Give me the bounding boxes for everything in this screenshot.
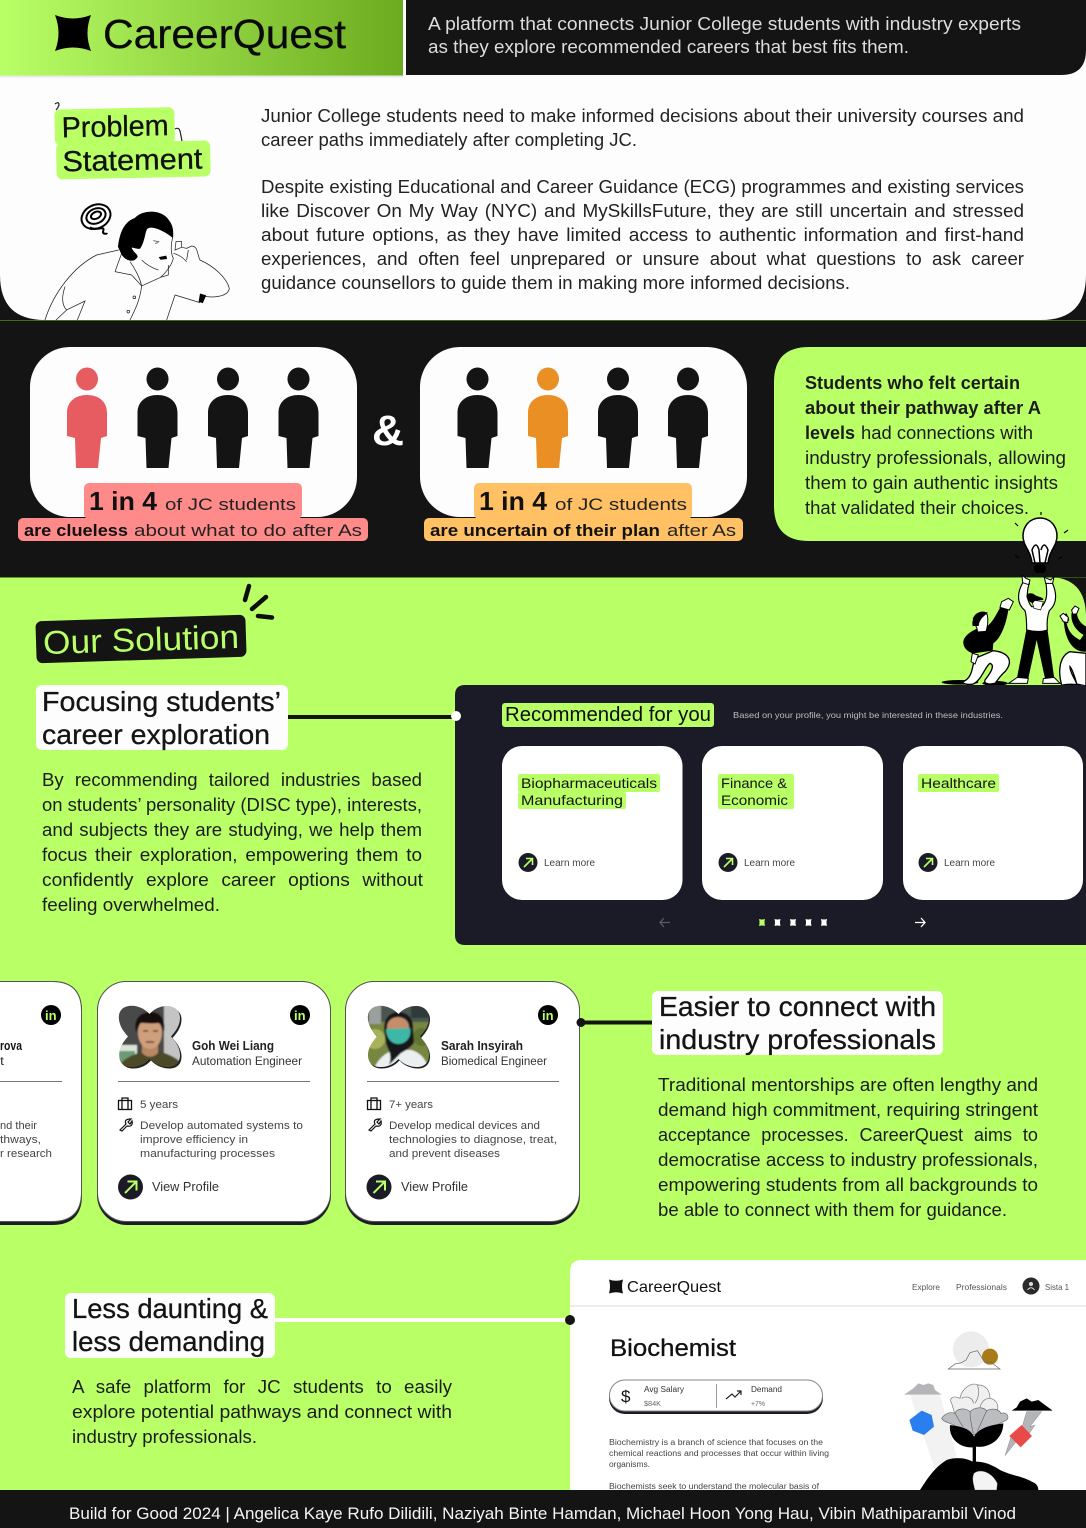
stats pill: $84K	[644, 1401, 661, 1408]
card: finance and economic: Learn more	[744, 858, 795, 869]
card: partially visible professional: rova	[0, 1039, 23, 1053]
card: finance and economic: Finance &	[721, 775, 788, 791]
card: Goh Wei Liang: Develop automated systems to	[140, 1120, 303, 1132]
card: Goh Wei Liang: improve efficiency in	[140, 1134, 248, 1146]
heading: recommended for you	[502, 703, 1003, 727]
text block: biochemistry description	[609, 1438, 829, 1491]
heading: our solution: Our Solution	[42, 618, 240, 661]
label: 1 in 4 clueless: are clueless	[24, 521, 128, 540]
heading: easier to connect: industry professionals	[659, 1024, 936, 1055]
text block: problem description: about future options, as they have limited access to authentic information and first-hand	[261, 225, 1024, 245]
heading: focusing students	[36, 685, 288, 750]
card: Goh Wei Liang: manufacturing processes	[140, 1148, 276, 1160]
text block: focusing description: By recommending tailored industries based	[42, 769, 422, 790]
button: view profile: View Profile	[401, 1179, 468, 1194]
text block: focusing description: focus their exploration, empowering them to	[42, 844, 422, 865]
card: healthcare: Healthcare	[921, 775, 996, 791]
header	[0, 0, 1086, 78]
photo: Sarah Insyirah	[368, 1006, 430, 1068]
illustration: people reaching up	[942, 575, 1086, 687]
heading: problem statement	[54, 106, 211, 180]
text block: problem description	[261, 106, 1024, 293]
text block: biochemistry description: organisms.	[609, 1460, 650, 1469]
illustration: biochemist plant	[904, 1331, 1053, 1490]
icon: four people, one red	[67, 368, 318, 468]
icon: light bulb	[1015, 512, 1068, 573]
icon: briefcase	[368, 1098, 380, 1110]
button: view profile	[118, 1174, 219, 1200]
heading: less daunting: less demanding	[72, 1326, 265, 1357]
text block: less daunting description: A safe platform for JC students to easily	[72, 1376, 453, 1397]
card: biopharmaceuticals: Manufacturing	[521, 792, 623, 808]
icon: four people, one orange	[458, 368, 708, 468]
text block: connect description: demand high commitment, requiring stringent	[658, 1099, 1038, 1120]
text block: less daunting description: explore potential pathways and connect with	[72, 1401, 452, 1422]
heading: easier to connect: Easier to connect with	[659, 991, 936, 1022]
icon: LinkedIn: in	[294, 1008, 306, 1023]
label: 1 in 4 uncertain: after As	[667, 521, 736, 540]
text block: problem description: guidance counsellors to guide them in making more informed decisions.	[261, 273, 850, 293]
panel: authentic insights callout: that validated their choices.	[805, 497, 1029, 518]
text block: problem description: career paths immediately after completing JC.	[261, 130, 637, 150]
card: Goh Wei Liang: 5 years	[140, 1099, 179, 1111]
card: healthcare: Learn more	[944, 858, 995, 869]
panel: statistic uncertain	[420, 347, 747, 541]
header: tagline: A platform that connects Junior College students with industry experts	[428, 14, 1021, 34]
icon: LinkedIn	[290, 1005, 310, 1025]
label: 1 in 4 clueless	[18, 483, 368, 541]
header: tagline: as they explore recommended careers that best fits them.	[428, 37, 909, 57]
card: biopharmaceuticals: Learn more	[544, 858, 595, 869]
stats pill	[609, 1380, 823, 1414]
footer: Build for Good 2024 | Angelica Kaye Rufo Dilidili, Naziyah Binte Hamdan, Michael Hoon Yong Hau, Vibin Mathiparambil Vinod	[69, 1504, 1016, 1523]
nav bar: Sista 1	[1045, 1283, 1070, 1292]
header: tagline	[406, 0, 1086, 75]
text block: connect description: acceptance processes. CareerQuest aims to	[658, 1124, 1038, 1145]
card: partially visible professional: t	[0, 1056, 5, 1068]
text block: biochemistry description: Biochemists seek to understand the molecular basis of	[609, 1482, 820, 1491]
stats pill: Demand	[751, 1385, 782, 1394]
icon: emphasis sparks	[245, 586, 272, 618]
text block: connect description: democratise access to industry professionals,	[658, 1149, 1038, 1170]
heading: less daunting	[65, 1293, 275, 1358]
card: Sarah Insyirah: 7+ years	[389, 1099, 434, 1111]
carousel controls	[660, 918, 925, 927]
text block: problem description: Junior College students need to make informed decisions about their university courses and	[261, 106, 1024, 126]
footer	[0, 1490, 1086, 1528]
heading: focusing students: Focusing students’	[42, 686, 281, 717]
card: finance and economic	[702, 746, 883, 900]
card: Sarah Insyirah: technologies to diagnose, treat,	[389, 1134, 557, 1146]
card: partially visible professional: in	[45, 1008, 57, 1023]
text block: connect description	[658, 1074, 1038, 1220]
label: 1 in 4 uncertain	[424, 483, 743, 541]
text block: less daunting description	[72, 1376, 453, 1447]
text block: biochemistry description: chemical reactions and processes that occur within living	[609, 1449, 829, 1458]
card: Goh Wei Liang: Goh Wei Liang	[192, 1039, 274, 1053]
photo: Goh Wei Liang	[118, 1006, 182, 1068]
connector line	[288, 711, 461, 721]
card: Goh Wei Liang: Automation Engineer	[192, 1056, 302, 1068]
text block: focusing description: confidently explore career options without	[42, 869, 423, 890]
icon: LinkedIn	[538, 1005, 558, 1025]
text block: focusing description: feeling overwhelmed.	[42, 894, 220, 915]
card: Sarah Insyirah: Develop medical devices and	[389, 1120, 540, 1132]
heading: our solution	[35, 586, 272, 663]
connector line	[576, 1018, 652, 1027]
icon: logo star	[55, 15, 91, 51]
card: biopharmaceuticals	[502, 746, 682, 900]
text block: connect description: Traditional mentorships are often lengthy and	[658, 1074, 1038, 1095]
heading: problem statement: Statement	[62, 143, 203, 178]
heading: problem statement: Problem	[61, 110, 169, 144]
label: 1 in 4 clueless: 1 in 4	[89, 486, 158, 516]
text block: focusing description: on students’ personality (DISC type), interests,	[42, 794, 422, 815]
label: 1 in 4 clueless: of JC students	[165, 495, 296, 514]
panel: authentic insights callout: about their pathway after A	[805, 397, 1041, 418]
heading: focusing students: career exploration	[42, 719, 270, 750]
text block: biochemistry description: Biochemistry is a branch of science that focuses on the	[609, 1438, 824, 1447]
section: easier to connect	[576, 991, 1038, 1220]
card: Goh Wei Liang	[97, 981, 331, 1225]
label: 1 in 4 uncertain: of JC students	[555, 495, 687, 514]
icon: wrench	[369, 1119, 381, 1131]
card: partially visible professional: nd their	[0, 1120, 37, 1132]
stats pill: Avg Salary	[644, 1385, 684, 1394]
text block: problem description: experiences, and often feel unprepared or unsure about what questions to ask career	[261, 249, 1024, 269]
icon: small question marks	[55, 103, 182, 141]
label: 1 in 4 uncertain: are uncertain of their plan	[430, 521, 660, 540]
heading: less daunting: Less daunting &	[72, 1293, 268, 1324]
heading: easier to connect	[652, 991, 943, 1055]
panel: authentic insights callout: them to gain authentic insights	[805, 472, 1058, 493]
card: Sarah Insyirah	[345, 981, 580, 1225]
nav bar: CareerQuest	[627, 1279, 722, 1296]
card: partially visible professional: thways,	[0, 1134, 41, 1146]
panel: career detail mockup: Biochemist	[610, 1335, 736, 1362]
text block: connect description: empowering students from all backgrounds to	[658, 1174, 1038, 1195]
text block: problem description: like Discover On My Way (NYC) and MySkillsFuture, they are still uncertain and stressed	[261, 201, 1024, 221]
stats pill: $	[621, 1387, 631, 1406]
card: partially visible professional: r research	[0, 1148, 52, 1160]
text block: focusing description: and subjects they are studying, we help them	[42, 819, 422, 840]
button: view profile: View Profile	[152, 1179, 219, 1194]
icon: wrench	[120, 1119, 132, 1131]
panel: statistic clueless	[18, 347, 368, 541]
button: view profile	[366, 1174, 468, 1200]
panel: authentic insights callout: had connections with	[861, 422, 1033, 443]
panel: authentic insights callout: Students who felt certain	[805, 372, 1020, 393]
card: Sarah Insyirah: Sarah Insyirah	[441, 1039, 523, 1053]
panel: recommended for you mockup	[288, 685, 1086, 945]
text block: less daunting description: industry professionals.	[72, 1426, 257, 1447]
heading: recommended for you: Recommended for you	[505, 704, 711, 726]
stats pill: +7%	[751, 1401, 765, 1408]
panel: authentic insights callout: industry professionals, allowing	[805, 447, 1066, 468]
text block: focusing description	[42, 769, 423, 915]
header: logo banner	[0, 0, 403, 78]
card: Sarah Insyirah: Biomedical Engineer	[441, 1056, 547, 1068]
text block: connect description: be able to connect with them for guidance.	[658, 1199, 1007, 1220]
label: 1 in 4 clueless: about what to do after As	[134, 521, 362, 540]
card: healthcare	[903, 746, 1083, 900]
illustration: confused student	[45, 200, 229, 320]
icon: briefcase	[118, 1098, 132, 1110]
panel: problem statement	[0, 0, 1086, 321]
nav bar	[570, 1278, 1086, 1307]
text block: problem description: Despite existing Educational and Career Guidance (ECG) programmes and existing services	[261, 177, 1024, 197]
card: partially visible professional	[0, 981, 82, 1225]
panel: authentic insights callout: levels	[805, 422, 855, 443]
heading: recommended for you: Based on your profile, you might be interested in these industries.	[733, 710, 1003, 720]
card: Sarah Insyirah: and prevent diseases	[389, 1148, 501, 1160]
card: biopharmaceuticals: Biopharmaceuticals	[521, 775, 657, 791]
icon: ampersand: &	[372, 407, 404, 455]
card: finance and economic: Economic	[721, 792, 788, 808]
nav bar: Professionals	[956, 1283, 1007, 1292]
nav bar: Explore	[912, 1283, 941, 1292]
panel: career detail mockup	[275, 1260, 1086, 1491]
panel: authentic insights callout	[774, 347, 1086, 541]
icon: LinkedIn: in	[542, 1008, 554, 1023]
label: 1 in 4 uncertain: 1 in 4	[479, 486, 548, 516]
section: focusing students	[36, 685, 423, 915]
header: logo banner: CareerQuest	[103, 11, 347, 57]
panel: our solution background	[0, 577, 1086, 1490]
connector line	[275, 1315, 575, 1325]
section: less daunting	[65, 1293, 453, 1447]
